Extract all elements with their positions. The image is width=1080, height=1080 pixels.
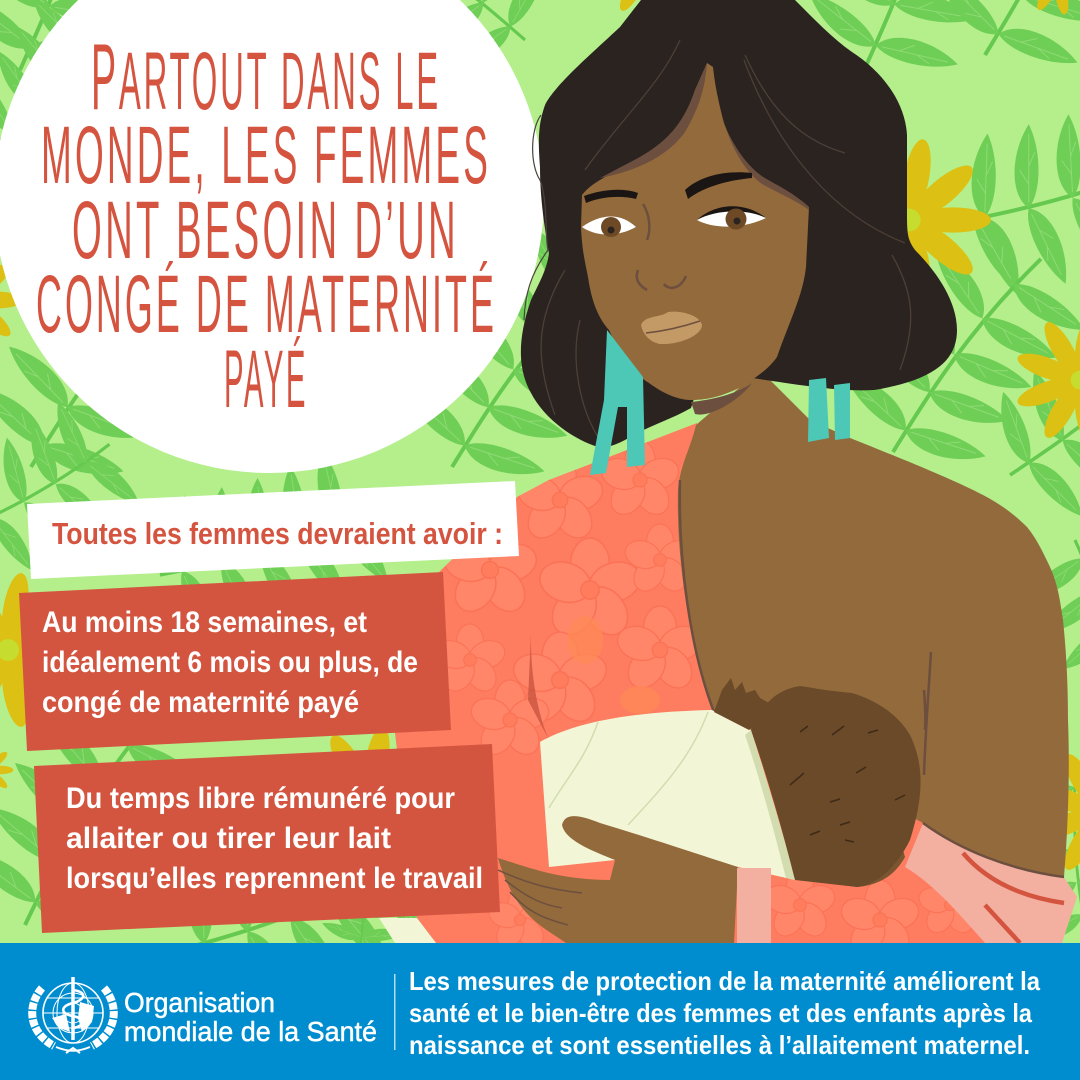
- pink drape: [905, 823, 1077, 943]
- red drape folds: [963, 853, 1064, 943]
- nose: [637, 204, 686, 290]
- chest and shoulder: [678, 370, 1069, 877]
- footer band: [0, 943, 1080, 1080]
- footer message: santé et le bien-être des femmes et des enfants après la: [409, 998, 1032, 1028]
- WHO name: [124, 987, 377, 1047]
- white title circle: [0, 0, 544, 473]
- text: CONGÉ DE MATERNITÉ: [36, 259, 497, 350]
- red box: 18 weeks: idéalement 6 mois ou plus, de: [42, 646, 418, 679]
- eyebrows: [584, 172, 752, 203]
- title: PAYÉ: [224, 334, 308, 425]
- red box: 18 weeks: [19, 572, 451, 751]
- woman illustration: [379, 0, 1077, 961]
- red box: 18 weeks: congé de maternité payé: [42, 686, 359, 719]
- pink cuff: [737, 868, 771, 943]
- red box: paid breaks: allaiter ou tirer leur lait: [66, 822, 391, 855]
- WHO name: Organisation: [124, 987, 275, 1018]
- neck shadow: [691, 383, 752, 415]
- text: PARTOUT DANS LE: [91, 24, 441, 129]
- icon: WHO emblem: [32, 977, 114, 1053]
- red box: 18 weeks: Au moins 18 semaines, et: [42, 606, 367, 639]
- subheading box: [27, 481, 519, 579]
- footer message: Les mesures de protection de la maternité améliorent la: [409, 966, 1040, 996]
- footer message: naissance et sont essentielles à l’allaitement maternel.: [409, 1030, 1030, 1060]
- blanket: [540, 710, 795, 880]
- divider: [394, 974, 396, 1050]
- blanket bit at lower left: [379, 918, 436, 943]
- lips: [641, 312, 702, 344]
- hair: [521, 0, 957, 447]
- eyes: [582, 216, 636, 235]
- mother's hand: [498, 816, 738, 943]
- dress: [395, 423, 1000, 961]
- red box: paid breaks: [34, 744, 500, 933]
- subheading box: Toutes les femmes devraient avoir :: [52, 516, 503, 551]
- red box: paid breaks: Du temps libre rémunéré pour: [66, 782, 455, 815]
- baby head and hand: [714, 678, 921, 887]
- earrings: [590, 330, 850, 475]
- face: [581, 63, 809, 400]
- title: ONT BESOIN D’UN: [72, 185, 459, 276]
- footer message: [409, 966, 1040, 1060]
- WHO name: mondiale de la Santé: [124, 1016, 377, 1047]
- text: MONDE, LES FEMMES: [41, 110, 491, 201]
- body outline shadow: [680, 480, 1064, 877]
- red box: paid breaks: lorsqu’elles reprennent le travail: [66, 862, 483, 895]
- title: [36, 24, 497, 425]
